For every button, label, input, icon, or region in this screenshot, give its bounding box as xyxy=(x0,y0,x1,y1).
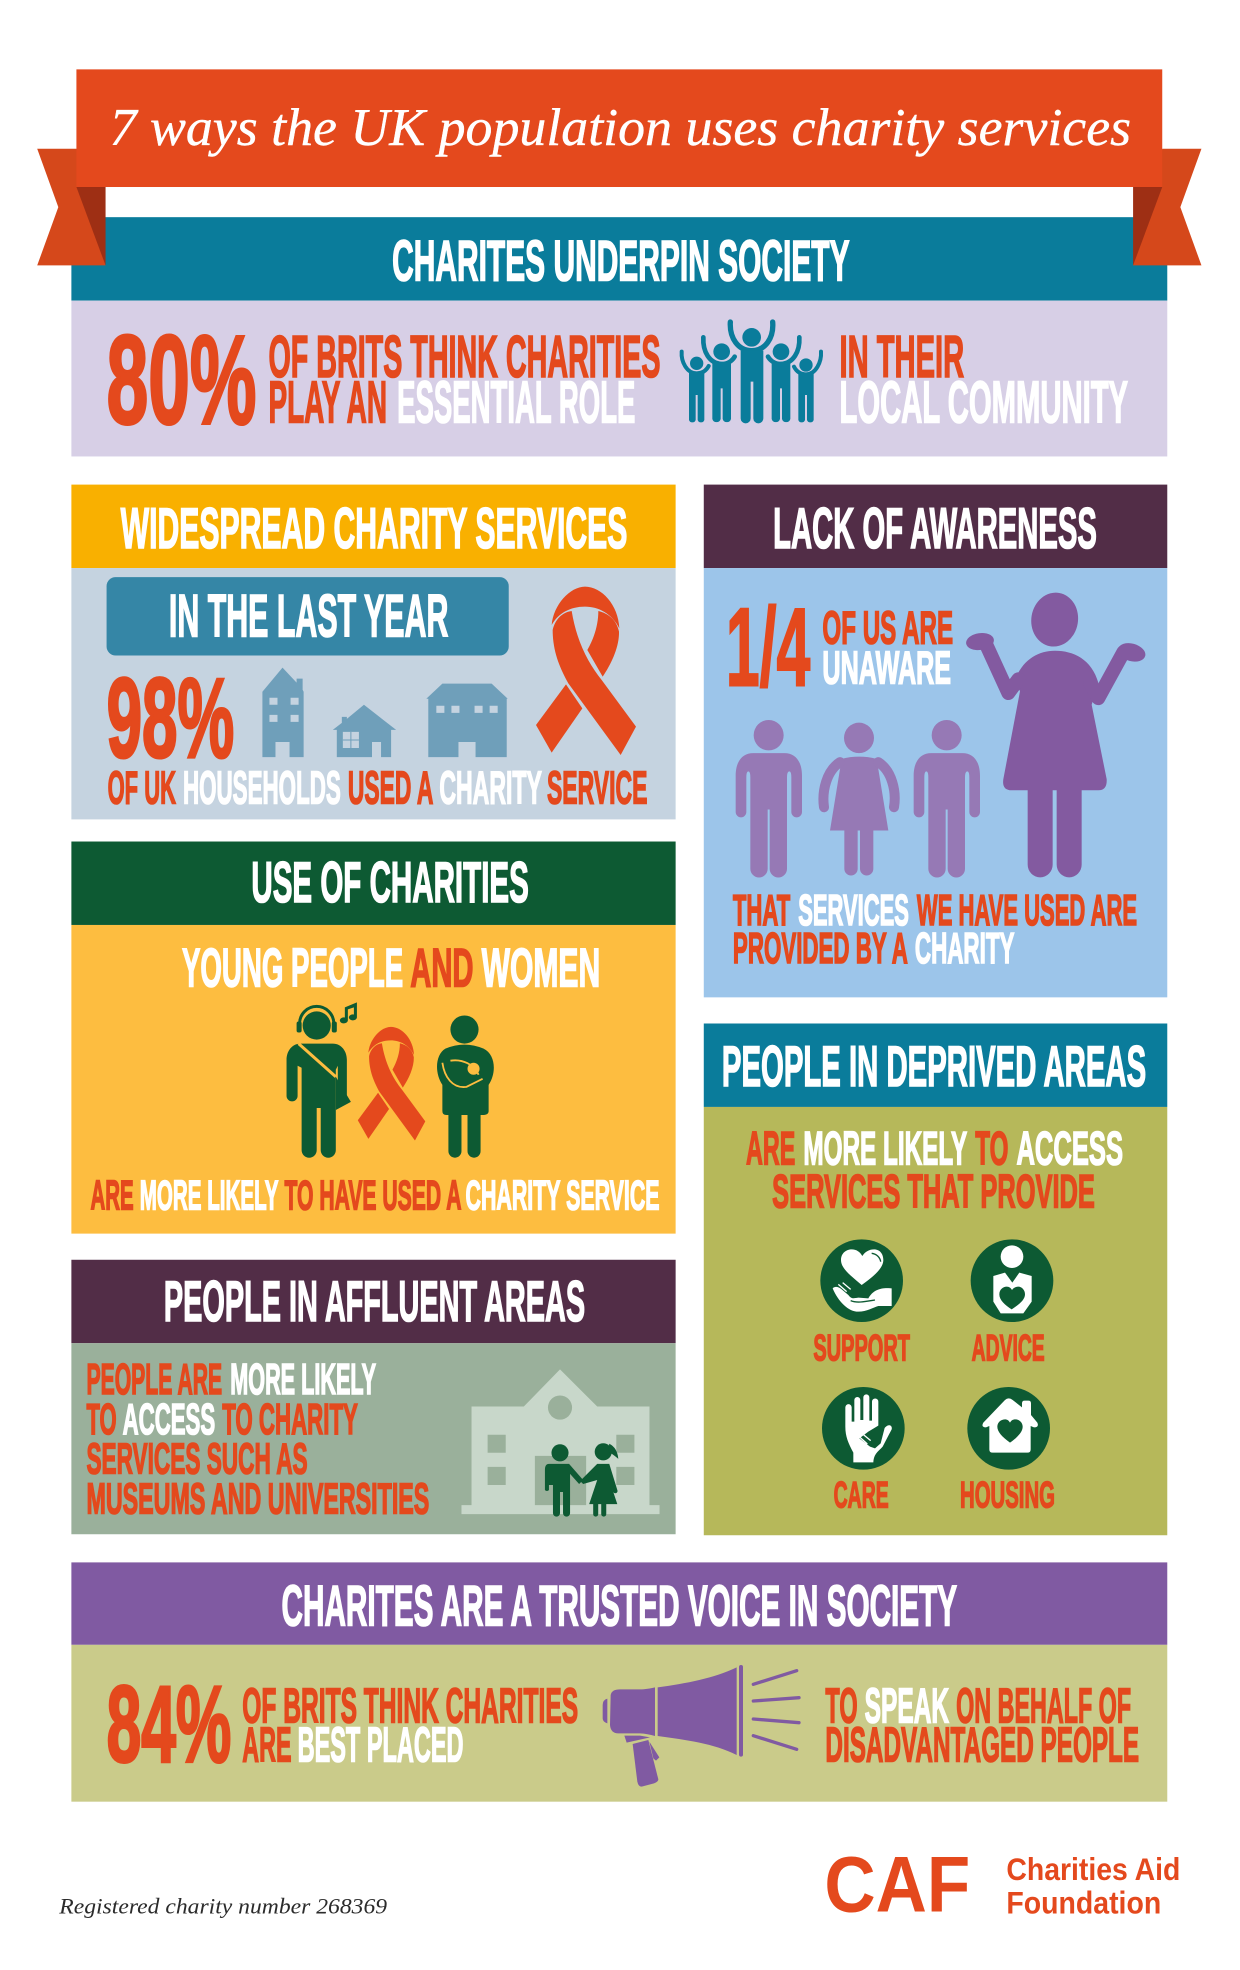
text: people are more likely to access charity services xyxy=(86,1356,429,1524)
panel: trusted voice in society: OF BRITS THINK CHARITIES xyxy=(242,1678,578,1733)
text: that services we have used are provided by a charity: PROVIDED BY A xyxy=(733,925,908,973)
stat: 80%: 80% xyxy=(107,308,256,450)
stat: 84%: 84% xyxy=(107,1664,231,1785)
text: are more likely to have used a charity service: CHARITY SERVICE xyxy=(466,1171,660,1218)
callout: in the last year xyxy=(107,577,509,656)
text: of Brits think charities play an essential role: PLAY AN xyxy=(268,368,387,435)
service: housing: HOUSING xyxy=(960,1475,1055,1516)
text: people are more likely to access charity services: PEOPLE ARE xyxy=(86,1356,222,1404)
icon: community group with raised arms xyxy=(682,322,821,423)
text: of Brits think charities are best placed: ARE xyxy=(242,1717,292,1772)
text: people are more likely to access charity services: ACCESS xyxy=(123,1396,215,1444)
icons: three houses xyxy=(262,668,508,757)
service: care xyxy=(822,1387,905,1516)
panel: use of charities xyxy=(71,842,676,1234)
panel: trusted voice in society xyxy=(71,1562,1167,1802)
logo: CAF Charities Aid Foundation: Charities Aid xyxy=(1006,1852,1180,1887)
icon: charity ribbon small xyxy=(358,1027,425,1141)
text: to speak on behalf of disadvantaged people xyxy=(825,1678,1139,1772)
panel: widespread charity services: SERVICE xyxy=(547,761,647,813)
panel: charities underpin society: OF BRITS THINK CHARITIES xyxy=(268,323,661,390)
text: to speak on behalf of disadvantaged people: TO xyxy=(825,1678,858,1733)
text: that services we have used are provided by a charity: CHARITY xyxy=(915,925,1015,973)
text: that services we have used are provided by a charity xyxy=(733,887,1137,973)
services: support, advice, care, housing xyxy=(813,1239,1055,1516)
text: that services we have used are provided by a charity: THAT xyxy=(733,887,790,935)
panel: people in affluent areas: PEOPLE IN AFFLUENT AREAS xyxy=(164,1270,585,1334)
logo: CAF Charities Aid Foundation xyxy=(824,1840,1180,1928)
text: people are more likely to access charity services: MORE LIKELY xyxy=(230,1356,376,1404)
logo: CAF Charities Aid Foundation: Foundation xyxy=(1006,1885,1161,1920)
text: of UK households used a charity service: CHARITY xyxy=(439,761,542,813)
text: of UK households used a charity service: OF UK xyxy=(108,761,176,813)
text: of UK households used a charity service xyxy=(108,761,647,813)
panel: widespread charity services xyxy=(71,485,676,819)
title banner with ribbon tails xyxy=(37,69,1201,265)
text: people are more likely to access charity services: MUSEUMS AND UNIVERSITIES xyxy=(86,1476,429,1524)
service: support: SUPPORT xyxy=(813,1328,910,1369)
text: people are more likely to access charity services: SERVICES SUCH AS xyxy=(86,1435,308,1483)
text: are more likely to access services that provide: TO xyxy=(975,1122,1008,1175)
icon: large shrugging woman xyxy=(965,589,1147,877)
text: are more likely to access services that provide: ARE xyxy=(746,1122,795,1175)
text: of us are unaware xyxy=(822,601,953,694)
icon: charity ribbon xyxy=(536,587,636,755)
icon: museum building xyxy=(461,1369,660,1514)
text: that services we have used are provided by a charity: SERVICES xyxy=(798,887,909,935)
service: support xyxy=(813,1239,910,1369)
text: young people and women: AND xyxy=(410,937,474,998)
text: of UK households used a charity service: USED A xyxy=(348,761,433,813)
text: of us are unaware: OF US ARE xyxy=(822,601,953,653)
text: are more likely to have used a charity service xyxy=(90,1171,660,1218)
service: advice xyxy=(971,1239,1053,1369)
icon: megaphone xyxy=(603,1665,799,1787)
panel: charities underpin society xyxy=(71,217,1167,456)
heading: widespread charity services: WIDESPREAD CHARITY SERVICES xyxy=(121,497,627,561)
panel: people in affluent areas xyxy=(71,1260,676,1534)
text: are more likely to have used a charity service: MORE LIKELY xyxy=(140,1171,279,1218)
heading: use of charities: USE OF CHARITIES xyxy=(251,851,529,915)
stat: 98%: 98% xyxy=(107,655,234,782)
text: people are more likely to access charity services: TO CHARITY xyxy=(222,1396,358,1444)
title: 7 ways the UK population uses charity services xyxy=(110,98,1131,157)
icon: couple holding hands xyxy=(545,1443,618,1517)
text: of UK households used a charity service: HOUSEHOLDS xyxy=(183,761,341,813)
text: of Brits think charities are best placed xyxy=(242,1678,578,1772)
text: of Brits think charities play an essential role xyxy=(268,323,661,435)
callout: in the last year: IN THE LAST YEAR xyxy=(169,581,448,649)
panel: people in deprived areas xyxy=(704,1023,1167,1535)
service: housing xyxy=(960,1387,1055,1516)
text: to speak on behalf of disadvantaged people: SPEAK xyxy=(865,1678,949,1733)
stat: 1/4: 1/4 xyxy=(726,585,810,710)
service: advice: ADVICE xyxy=(972,1328,1045,1369)
text: of us are unaware: UNAWARE xyxy=(822,642,951,694)
text: people are more likely to access charity services: TO xyxy=(86,1396,117,1444)
text: are more likely to have used a charity service: TO HAVE USED A xyxy=(285,1171,461,1218)
service: care: CARE xyxy=(834,1475,889,1516)
text: are more likely to access services that provide: ACCESS xyxy=(1016,1122,1123,1175)
ribbon tail: left xyxy=(37,149,106,265)
icon: three smaller people xyxy=(736,720,980,877)
ribbon tail: right xyxy=(1133,149,1201,265)
icon: music note xyxy=(340,1002,357,1023)
logo: CAF Charities Aid Foundation: CAF xyxy=(824,1840,970,1928)
icon: young person with headphones and satchel xyxy=(287,1002,357,1158)
text: of Brits think charities are best placed: BEST PLACED xyxy=(298,1717,463,1772)
text: are more likely to have used a charity service: ARE xyxy=(90,1171,134,1218)
text: are more likely to access services that provide xyxy=(746,1122,1123,1218)
text: are more likely to access services that provide: MORE LIKELY xyxy=(803,1122,967,1175)
text: young people and women: WOMEN xyxy=(482,937,600,998)
footer: registered charity number: Registered charity number 268369 xyxy=(58,1893,387,1918)
text: in their local community xyxy=(840,323,1128,435)
text: of Brits think charities play an essential role: ESSENTIAL ROLE xyxy=(397,368,635,435)
text: in their local community: IN THEIR xyxy=(840,323,964,390)
text: young people and women: YOUNG PEOPLE xyxy=(182,937,403,998)
icon: mother holding baby xyxy=(437,1015,494,1158)
panel: lack of awareness xyxy=(704,485,1167,997)
